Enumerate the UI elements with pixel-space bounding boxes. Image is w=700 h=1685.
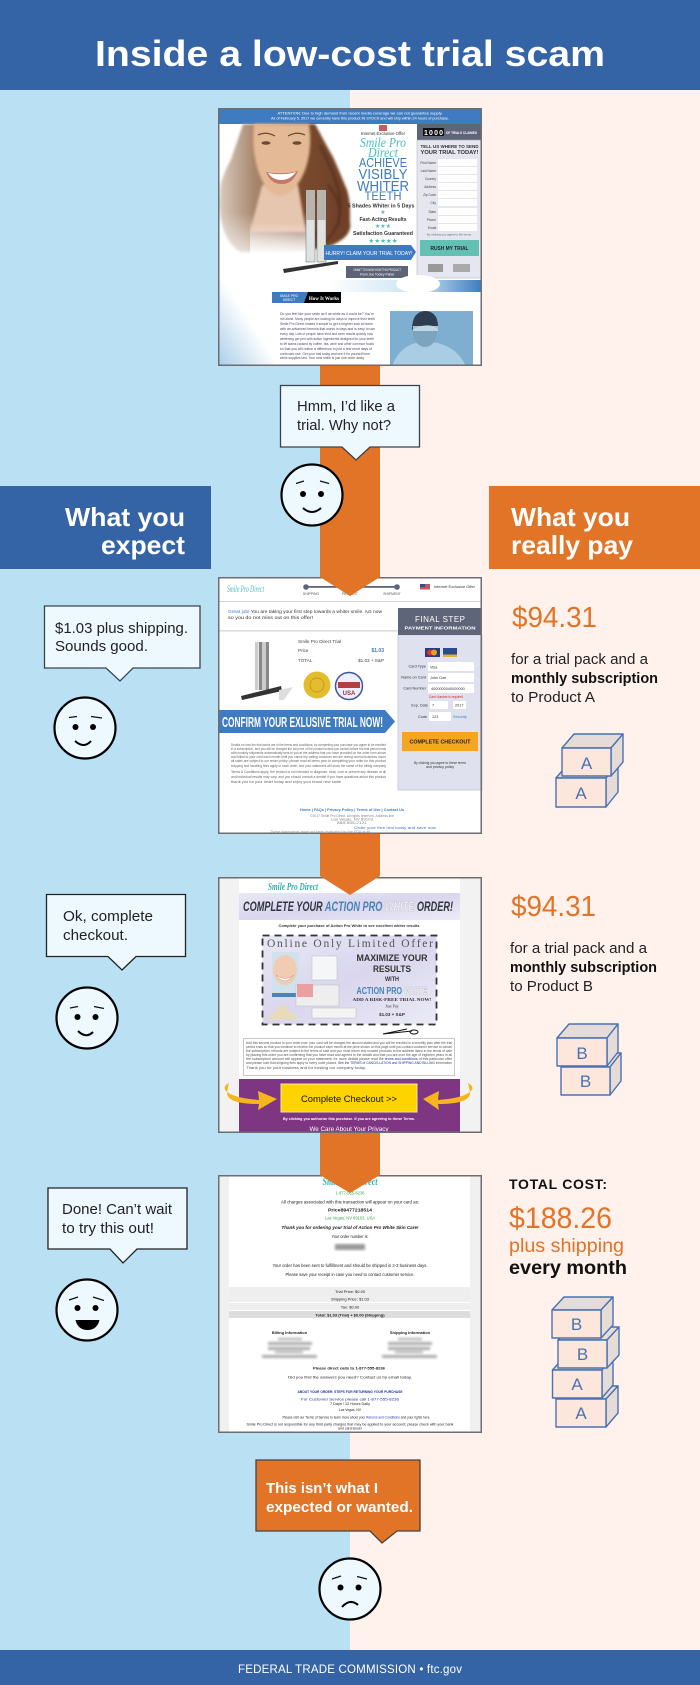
footer bbox=[0, 1650, 700, 1685]
speech bubble: Ok, complete checkout bbox=[46, 894, 186, 970]
offer headline: Smile Pro bbox=[360, 136, 406, 151]
lower page band and tabs: SMILE PRO bbox=[280, 294, 299, 298]
page header with progress bar bbox=[218, 584, 482, 602]
page footer links: ©2017 Smile Pro Direct. All rights reserved. Address line bbox=[310, 814, 394, 818]
icon: boxes A A: A bbox=[575, 784, 587, 803]
title banner bbox=[0, 0, 700, 90]
screenshot 3: upsell page bbox=[218, 877, 482, 1133]
screenshot 1: trial offer landing page: As of February 5, 2017 we currently have this product IN STOCK and will ship within 24 hours of purchase. bbox=[271, 116, 449, 120]
fine print: thank you for your order today and enjoy your brand new smile bbox=[231, 780, 341, 784]
price block: Product B: to Product B bbox=[510, 978, 593, 995]
face: happy 1 bbox=[54, 698, 116, 758]
upsell fine print: the subscription amount will appear on your statement; for more details please read the terms and conditions of this particular offer bbox=[246, 1057, 453, 1061]
background: left blue side bbox=[0, 0, 350, 1685]
confirmation text: Price89477218514 bbox=[328, 1208, 372, 1214]
speech bubble: This isn't what I expected: expected or wanted. bbox=[266, 1500, 413, 1516]
icon: boxes B B: B bbox=[576, 1044, 588, 1063]
total cost block: $188.26 bbox=[509, 1202, 612, 1235]
trial signup form: YOUR TRIAL TODAY! bbox=[420, 150, 479, 156]
banner: What you expect: What you bbox=[65, 502, 185, 532]
offer headline: Satisfaction Guaranteed bbox=[353, 231, 413, 237]
trial signup form: State bbox=[429, 210, 436, 214]
confirmation text: Your order number is: bbox=[332, 1234, 368, 1239]
article text: Do you feel like your smile isn't as white as it could be? You're bbox=[280, 312, 374, 316]
price block: Product B: $94.31 bbox=[511, 891, 596, 923]
banner: What you really pay bbox=[489, 486, 700, 569]
billing and shipping info bbox=[262, 1330, 437, 1358]
trial signup form: Email bbox=[428, 226, 436, 230]
total cost block: every month bbox=[509, 1258, 627, 1279]
price block: Product A bbox=[511, 602, 658, 706]
upsell headline band: COMPLETE YOUR ACTION PRO WHITE ORDER! bbox=[243, 899, 453, 914]
confirmation footer text: Please visit our Terms of Service to learn more about your Returns and Conditions and your rights here bbox=[282, 1414, 430, 1420]
intro text: Great job! You are taking your first step towards a whiter smile. Act now bbox=[228, 609, 383, 614]
speech bubble: This isn't what I expected bbox=[256, 1460, 420, 1543]
coupon bbox=[262, 936, 436, 1034]
page header with progress bar: SHIPMENT bbox=[383, 592, 401, 596]
upsell fine print: the subscription; refunds are subject to the terms of sale and you must return any unused products to the address listed in the terms of sale bbox=[246, 1049, 452, 1053]
speech bubble: Done! Can't wait: Done! Can’t wait bbox=[62, 1201, 173, 1218]
article text: to lift stains caused by coffee, tea, wine and other common foods bbox=[280, 342, 374, 346]
page header with progress bar: SHIPPING bbox=[303, 592, 319, 596]
photo fade over shoulders bbox=[222, 214, 306, 254]
coupon: WITH bbox=[385, 977, 399, 983]
purple checkout section: By clicking you authorize this purchase. If you are agreeing to these Terms. bbox=[283, 1116, 415, 1121]
payment panel: Exp. Date bbox=[411, 704, 428, 708]
payment panel bbox=[398, 608, 482, 790]
page footer links: These statements have not been evaluated by the FDA at all bbox=[270, 830, 370, 834]
screenshot 2: checkout page bbox=[218, 577, 482, 834]
payment panel: By clicking you agree to these terms bbox=[414, 761, 466, 765]
icon: boxes B B bbox=[557, 1024, 621, 1095]
hurry button: HURRY! CLAIM YOUR TRIAL TODAY! bbox=[326, 251, 413, 257]
blurred order number bbox=[335, 1244, 365, 1250]
lab scientist photo bbox=[390, 311, 473, 366]
screenshot 1: trial offer landing page bbox=[218, 108, 482, 366]
speech bubble: Ok, complete checkout: Ok, complete bbox=[63, 908, 153, 925]
arrow: checkout to upsell bbox=[320, 834, 380, 895]
trial signup form: OF TRIALS CLAIMED bbox=[446, 131, 477, 135]
speech bubble: Hmm, I'd like a trial: trial. Why not? bbox=[297, 417, 391, 434]
speech bubble: $1.03 plus shipping bbox=[44, 606, 200, 681]
speech bubble: $1.03 plus shipping: Sounds good. bbox=[55, 638, 148, 655]
fine print: with monthly shipments automatically sent to you at the address that you have provided on the order form above bbox=[231, 751, 386, 755]
fine print: and individual results may vary, and you should consult a dentist if you have questions about this product bbox=[231, 775, 386, 779]
fine print: all sales are subject to our return policy; please read all terms prior to completing your order for this product bbox=[231, 759, 386, 763]
upsell headline band bbox=[239, 893, 460, 920]
speech bubble: $1.03 plus shipping: $1.03 plus shipping. bbox=[55, 620, 188, 637]
face: disappointed bbox=[320, 1558, 380, 1620]
confirmation text bbox=[272, 1176, 428, 1277]
background: right pink side bbox=[350, 0, 700, 1685]
icon: boxes B B: B bbox=[580, 1072, 591, 1091]
confirm banner bbox=[218, 710, 395, 733]
icon: stacked boxes A A B B: B bbox=[577, 1345, 588, 1364]
icon: stacked boxes A A B B: A bbox=[571, 1375, 583, 1394]
confirmation footer text: ABOUT YOUR ORDER: STEPS FOR RETURNING YOUR PURCHASE bbox=[298, 1389, 403, 1394]
billing and shipping info: Shipping Information bbox=[390, 1330, 431, 1335]
price block: Product B: for a trial pack and a bbox=[510, 940, 648, 957]
fine print bbox=[231, 743, 386, 784]
price block: Product A: monthly subscription bbox=[511, 670, 658, 687]
confirmation text: Please save your receipt in case you need to contact customer service. bbox=[286, 1272, 414, 1277]
offer headline: ★ bbox=[380, 209, 386, 216]
price block: Product A: for a trial pack and a bbox=[511, 651, 649, 668]
offer headline: ★★★ bbox=[375, 223, 391, 230]
article text: continued use. Get your trial today and see it for yourself here bbox=[280, 352, 370, 356]
trial signup form: 1000 bbox=[424, 130, 443, 137]
article text: Smile Pro Direct makes it simple to get a brighter look at home bbox=[280, 322, 373, 326]
coupon: MAXIMIZE YOUR bbox=[356, 953, 428, 964]
offer headline: ACHIEVE bbox=[359, 155, 407, 170]
yellow arrows bbox=[225, 1083, 472, 1110]
page header with progress bar: Internet Exclusive Offer bbox=[434, 585, 476, 589]
upsell fine print: by placing this order you are confirming that you have read and agreed to the details and that you are over the age of eighteen years in all bbox=[246, 1053, 452, 1057]
speech bubble: Hmm, I'd like a trial: Hmm, I’d like a bbox=[297, 398, 396, 415]
payment panel: Card Number is required bbox=[429, 695, 463, 699]
fine print: and billed to your card each month until you cancel by calling customer service during normal business hours bbox=[231, 755, 386, 759]
arrow: upsell to confirmation bbox=[320, 1133, 380, 1193]
confirmation footer text: Did you find the answers you need? Contact us by email today. bbox=[288, 1374, 412, 1380]
speech bubble: Done! Can't wait bbox=[48, 1188, 187, 1263]
price block: Product A: $94.31 bbox=[512, 602, 597, 634]
confirmation text: 1-877-555-8236 bbox=[336, 1190, 365, 1196]
offer headline: ★★★★★ bbox=[368, 237, 398, 245]
price block: Product B bbox=[510, 891, 657, 995]
product pens bbox=[283, 190, 338, 273]
purple checkout section: We Care About Your Privacy bbox=[310, 1127, 388, 1133]
confirmation footer text: Las Vegas, NV bbox=[339, 1407, 361, 1412]
price block: Product B: monthly subscription bbox=[510, 959, 657, 976]
hurry button bbox=[324, 245, 416, 278]
article text bbox=[280, 312, 375, 360]
trial signup form: TELL US WHERE TO SEND bbox=[420, 144, 478, 149]
fine print: shipping and handling fees apply to each order, and your statement will show the name of the billing company bbox=[231, 764, 386, 768]
payment panel: Name on Card bbox=[401, 676, 426, 680]
coupon: ACTION PRO WHITE bbox=[356, 986, 428, 997]
total cost block: TOTAL COST: bbox=[509, 1176, 607, 1192]
offer headline: WHITER bbox=[357, 178, 409, 195]
offer headline bbox=[348, 125, 414, 245]
billing and shipping info: Billing Information bbox=[272, 1330, 308, 1335]
payment panel: 2017 bbox=[455, 704, 463, 708]
lower page band and tabs: DIRECT bbox=[283, 298, 295, 302]
speech bubble: Done! Can't wait: to try this out! bbox=[62, 1220, 154, 1237]
trial signup form: Zip Code bbox=[423, 193, 436, 197]
coupon: ADD A RISK-FREE TRIAL NOW! bbox=[352, 998, 432, 1002]
product summary: TOTAL bbox=[298, 658, 313, 663]
article text: so that you will notice a difference in just a few short days of bbox=[280, 347, 372, 351]
trial signup form: Address bbox=[424, 185, 436, 189]
trial signup form: By clicking you agree to the terms bbox=[427, 232, 472, 236]
product summary: USA bbox=[343, 691, 356, 697]
arrow: landing page to checkout bbox=[320, 366, 380, 596]
upsell fine print: Thank you for your business and for trusting our company today. bbox=[246, 1066, 366, 1070]
icon: stacked boxes A A B B: B bbox=[571, 1315, 582, 1334]
article text: while supplies last. Your new smile is just one order away bbox=[280, 356, 364, 360]
confirmation text: Thank you for ordering your trial of Action Pro White Skin Care! bbox=[282, 1225, 419, 1231]
page header with progress bar: Smile Pro Direct bbox=[227, 584, 264, 594]
confirmation footer text: 7 Days / 12 Hours Daily bbox=[330, 1401, 370, 1406]
page footer links: Las Vegas, NV 89103 bbox=[331, 818, 373, 822]
confirmation footer text: and card issuer bbox=[338, 1426, 363, 1430]
fine print: Details on how the trial works are in the terms and conditions; by completing your purchase you agree to be enrolled bbox=[231, 743, 386, 747]
banner: What you really pay: What you bbox=[511, 502, 630, 532]
intro text bbox=[228, 609, 383, 620]
confirmation text: Las Vegas, NV 89103, USA bbox=[325, 1216, 375, 1220]
trial signup form: Phone bbox=[427, 218, 436, 222]
offer headline: 5 Shades Whiter in 5 Days bbox=[348, 204, 414, 210]
offer headline: TEETH bbox=[364, 189, 402, 203]
payment panel: Card Type bbox=[409, 664, 426, 668]
offer headline: VISIBLY bbox=[358, 166, 408, 183]
payment panel: PAYMENT INFORMATION bbox=[404, 626, 476, 630]
payment panel: COMPLETE CHECKOUT bbox=[410, 740, 470, 746]
trial signup form bbox=[417, 124, 482, 278]
price block: Product A: to Product A bbox=[511, 689, 595, 706]
icon: boxes A A: A bbox=[581, 754, 593, 773]
offer headline: Internet Exclusive Offer bbox=[361, 131, 405, 136]
trial signup form: Country bbox=[425, 177, 436, 181]
product summary: Price bbox=[298, 648, 309, 653]
price table: Tax: $0.00 bbox=[341, 1304, 360, 1310]
article text: with an advanced formula that works in days and is easy to use bbox=[280, 327, 375, 331]
face: curious smile bbox=[282, 464, 342, 526]
icon: stacked boxes A A B B bbox=[552, 1297, 619, 1427]
page footer links: Home | FAQs | Privacy Policy | Terms of Use | Contact Us bbox=[300, 808, 404, 812]
confirmation text: Your order has been sent to fulfillment and should be shipped in 2-3 business days. bbox=[272, 1263, 428, 1268]
hurry button: I WANT TO KNOW HOW THIS PRODUCT bbox=[353, 268, 401, 272]
purple checkout section: Complete Checkout >> bbox=[301, 1094, 397, 1105]
page footer links bbox=[270, 808, 437, 834]
lower page band and tabs: How It Works bbox=[309, 297, 339, 302]
speech bubble: Hmm, I'd like a trial bbox=[280, 386, 420, 460]
offer headline: Direct bbox=[367, 146, 399, 161]
banner: What you really pay: really pay bbox=[511, 530, 634, 560]
product summary: $1.03 + S&P bbox=[358, 658, 384, 663]
banner: What you expect bbox=[0, 486, 211, 569]
page footer links: Order your free trial today and save now bbox=[354, 826, 437, 830]
price table: Shipping Price: $1.03 bbox=[331, 1296, 370, 1302]
intro text: so you do not miss out on this offer! bbox=[228, 615, 313, 620]
upsell fine print: Add this second product to your order now: your card will be charged the amount stated and you will be enrolled in a monthly plan after the trial bbox=[246, 1041, 452, 1045]
banner: What you expect: expect bbox=[101, 530, 185, 560]
product summary: Smile Pro Direct Trial bbox=[298, 639, 341, 644]
title banner: Inside a low-cost trial scam bbox=[95, 33, 605, 74]
trial signup form: City bbox=[430, 201, 436, 205]
upsell fine print: and please note that shipping fees apply to every order placed, See the TERMS of CANCELLATION and SHIPPING AND BILLING information bbox=[246, 1061, 452, 1065]
icon: boxes A A bbox=[556, 734, 623, 807]
upsell fine print bbox=[244, 1038, 454, 1076]
trial signup form: First Name bbox=[420, 161, 436, 165]
purple checkout section bbox=[239, 1079, 460, 1133]
screenshot 3: upsell page: Complete your purchase of Action Pro White to see excellent whiter results bbox=[278, 923, 420, 928]
coupon: $1.03 + S&P bbox=[379, 1012, 405, 1017]
confirmation text: Smile Pro Direct bbox=[322, 1176, 378, 1188]
total cost block: plus shipping bbox=[509, 1236, 624, 1257]
upsell logo: Smile Pro Direct bbox=[268, 882, 319, 893]
speech bubble: This isn't what I expected: This isn’t what I bbox=[266, 1481, 378, 1497]
page header with progress bar: PAYMENT bbox=[342, 592, 358, 596]
product summary bbox=[241, 639, 384, 700]
coupon: RESULTS bbox=[373, 964, 411, 975]
trial signup form: RUSH MY TRIAL bbox=[430, 246, 468, 252]
price table: Total: $1.03 (Trial) + $0.00 (Shipping) bbox=[315, 1312, 385, 1318]
fine print: Terms & Conditions apply; the product is not intended to diagnose, treat, cure or prevent any disease at all bbox=[231, 770, 386, 774]
screenshot 4: order confirmation page bbox=[218, 1175, 482, 1433]
total cost block bbox=[509, 1176, 627, 1279]
offer headline: Fast-Acting Results bbox=[360, 217, 406, 223]
confirmation text: All charges associated with this transaction will appear on your card as: bbox=[281, 1200, 419, 1204]
hurry button: From Joe Tooley Panel bbox=[360, 272, 394, 276]
article text: every day. Lots of people have tried and seen results quickly now bbox=[280, 332, 373, 336]
payment panel: Security bbox=[453, 715, 467, 719]
confirmation footer text: Smile Pro Direct is not responsible for any third party charges that may be applied to your account; please check with your bank bbox=[246, 1422, 454, 1426]
payment panel: Visa bbox=[430, 666, 438, 670]
face: excited bbox=[56, 1280, 118, 1340]
fine print: in a subscription, and you will be charged the full price of the product unless you cancel before the trial period ends bbox=[231, 747, 386, 751]
confirmation footer text: For Customer Service please call 1-877-555-8236 bbox=[301, 1396, 400, 1402]
price table: Trial Price: $0.00 bbox=[335, 1289, 366, 1294]
page footer links: 888-555-2121 bbox=[337, 821, 367, 825]
lower page band and tabs bbox=[272, 275, 482, 303]
payment panel: FINAL STEP bbox=[415, 615, 465, 624]
article text: not alone. Many people are looking for ways to improve their teeth bbox=[280, 317, 375, 321]
footer: FEDERAL TRADE COMMISSION • ftc.gov bbox=[238, 1664, 462, 1676]
confirmation footer text bbox=[246, 1366, 454, 1430]
screenshot 1: trial offer landing page: ATTENTION: Due to high demand from recent media coverage we can not guarantee supply. bbox=[278, 110, 442, 116]
payment panel: Card Number bbox=[403, 686, 427, 690]
payment panel: Code bbox=[418, 715, 427, 719]
payment panel: John Doe bbox=[430, 676, 446, 680]
icon: stacked boxes A A B B: A bbox=[575, 1404, 587, 1423]
payment panel: 123 bbox=[432, 715, 438, 719]
confirmation footer text: Please direct calls to 1-877-555-8236 bbox=[313, 1366, 386, 1370]
payment panel: 4000000040000000 bbox=[431, 687, 465, 691]
upsell fine print: period ends so that you continue to receive the product each month at the price shown on this page until you contact customer service to cancel bbox=[246, 1045, 452, 1049]
article text: whitening gel pen with active ingredients designed for your teeth bbox=[280, 337, 374, 341]
speech bubble: Ok, complete checkout: checkout. bbox=[63, 927, 128, 944]
confirm banner: CONFIRM YOUR EXLUSIVE TRIAL NOW! bbox=[222, 714, 383, 731]
face: happy 2 bbox=[56, 988, 118, 1048]
trial signup form: Last Name bbox=[421, 169, 436, 173]
payment panel: and privacy policy bbox=[426, 765, 454, 769]
price table bbox=[229, 1287, 470, 1318]
product summary: $1.03 bbox=[371, 648, 384, 654]
coupon: Online Only Limited Offer bbox=[267, 938, 433, 950]
coupon: Just Pay bbox=[385, 1004, 399, 1008]
payment panel: 7 bbox=[432, 704, 434, 708]
